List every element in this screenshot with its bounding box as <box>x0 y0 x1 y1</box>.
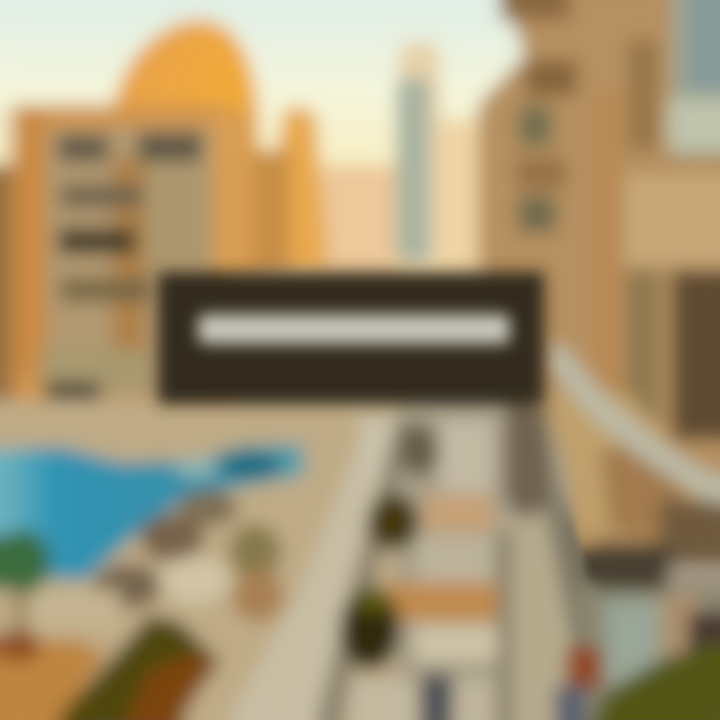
foreground shrub <box>55 615 220 720</box>
distant skyline <box>0 120 480 405</box>
terracotta garden, bottom left <box>0 630 105 720</box>
right sandstone tower <box>478 0 720 560</box>
walkway planters and benches <box>340 424 497 720</box>
recessed windows <box>594 543 720 595</box>
green foreground foliage <box>590 640 720 720</box>
poolside loungers and planting <box>30 490 284 630</box>
banner panel <box>158 272 544 404</box>
facade below balcony <box>540 395 720 560</box>
ground plaza <box>0 400 550 720</box>
sky <box>0 0 560 300</box>
swimming pool <box>0 444 305 580</box>
block windows <box>46 132 202 406</box>
left apartment block <box>12 105 252 406</box>
palm tree by pool <box>0 530 50 635</box>
walkway shadow strips <box>316 400 590 720</box>
lower planter <box>340 586 400 670</box>
light paving slab <box>415 625 497 661</box>
figure in red and blue <box>555 646 602 720</box>
central walkway <box>228 400 585 720</box>
block facade <box>12 105 252 400</box>
curved white balcony and lower right facade <box>540 342 720 595</box>
lower bench <box>385 583 497 621</box>
glass tower <box>396 42 440 267</box>
banner headline, illegible in reference <box>198 314 510 344</box>
lower right courtyard <box>575 590 720 720</box>
upper bench <box>424 496 492 530</box>
middle planter <box>367 494 419 550</box>
upper planter <box>399 424 439 476</box>
balcony rail <box>546 342 720 506</box>
dark banner <box>158 272 544 404</box>
golden domed building <box>112 20 328 280</box>
person in dark clothes <box>421 674 453 720</box>
